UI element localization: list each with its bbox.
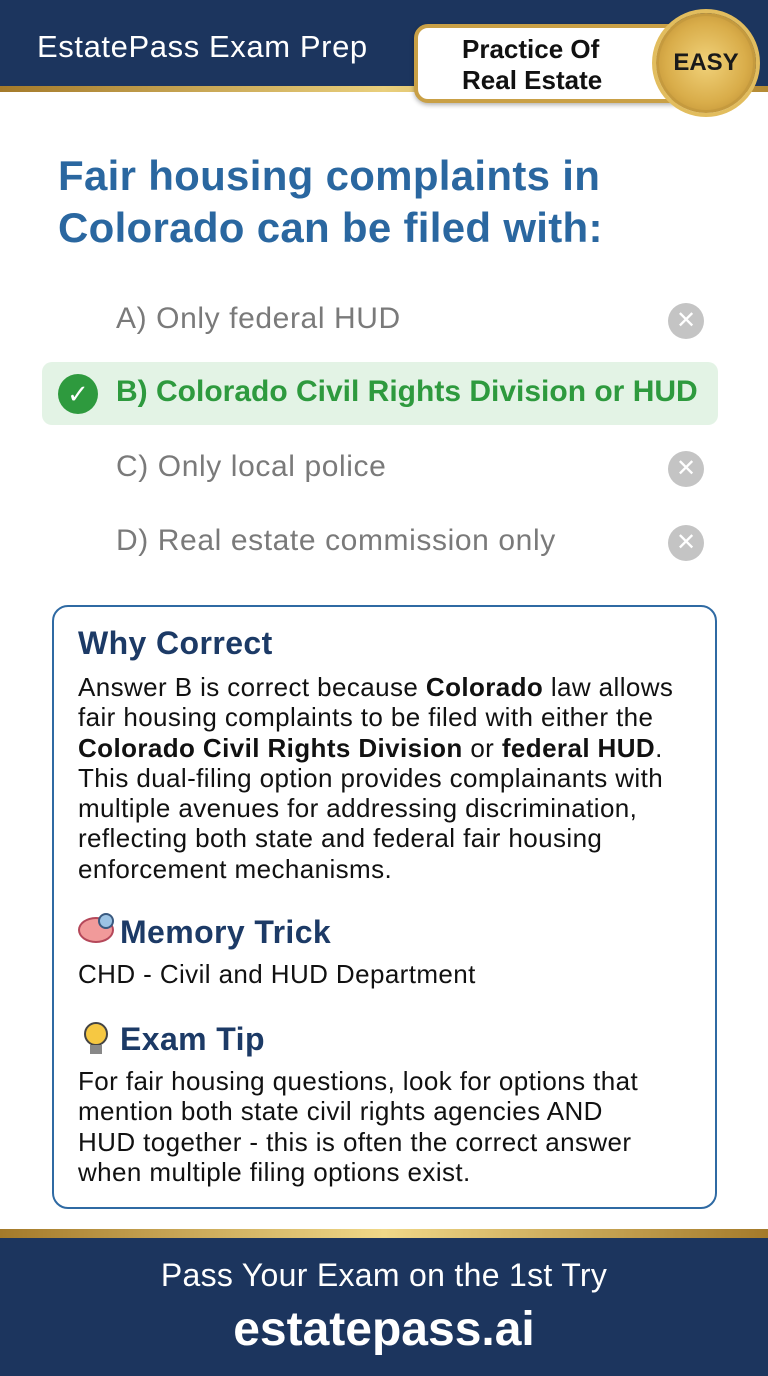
gold stripe top (0, 86, 768, 92)
option A: A) Only federal HUD (116, 302, 401, 335)
footer tagline: Pass Your Exam on the 1st Try (161, 1257, 607, 1293)
text: exam tip: HUD together - this is often the correct answer (78, 1127, 631, 1157)
seal: EASY: EASY (673, 49, 739, 76)
question heading: Colorado can be filed with: (58, 204, 603, 251)
option D (116, 524, 704, 561)
option C: C) Only local police (116, 450, 386, 483)
icon: x: ✕ (676, 307, 696, 334)
gold stripe bottom (0, 1229, 768, 1238)
text: exam tip: when multiple filing options exist. (78, 1157, 471, 1187)
text: explanation: Answer B is correct because Colorado law allows (78, 672, 673, 702)
badge: practice of real estate: Real Estate (462, 65, 602, 95)
text: exam tip (78, 1066, 638, 1187)
text: explanation: enforcement mechanisms. (78, 854, 392, 884)
icon: x (668, 303, 704, 339)
panel: explanation (52, 605, 717, 1209)
text: exam tip: For fair housing questions, look for options that (78, 1066, 638, 1096)
question heading: Fair housing complaints in (58, 152, 600, 199)
text: memory trick: CHD - Civil and HUD Department (78, 959, 476, 989)
text: explanation: Colorado Civil Rights Division or federal HUD. (78, 733, 663, 763)
option C (116, 450, 704, 487)
option B correct (42, 362, 718, 425)
heading: memory trick: Memory Trick (120, 914, 331, 950)
option A (116, 302, 704, 339)
text: exam tip: mention both state civil rights agencies AND (78, 1096, 603, 1126)
brand title: EstatePass Exam Prep (37, 29, 368, 64)
icon: brain (78, 913, 114, 943)
option B correct: B) Colorado Civil Rights Division or HUD (116, 375, 698, 408)
badge: practice of real estate (414, 24, 694, 103)
header bar (0, 0, 768, 88)
option D: D) Real estate commission only (116, 524, 556, 557)
heading: why correct: Why Correct (78, 625, 273, 661)
text: explanation: fair housing complaints to be filed with either the (78, 702, 653, 732)
icon: lightbulb (84, 1022, 108, 1054)
footer url: estatepass.ai (233, 1303, 535, 1356)
badge: practice of real estate: Practice Of (462, 34, 599, 64)
icon: x (668, 451, 704, 487)
heading: exam tip: Exam Tip (120, 1021, 265, 1057)
icon: x: ✕ (676, 529, 696, 556)
icon: x (668, 525, 704, 561)
icon: check (58, 374, 98, 414)
icon: check: ✓ (67, 379, 89, 409)
text: explanation: This dual-filing option provides complainants with (78, 763, 663, 793)
footer (0, 1238, 768, 1376)
icon: x: ✕ (676, 455, 696, 482)
text: explanation (78, 672, 673, 884)
text: explanation: reflecting both state and federal fair housing (78, 823, 602, 853)
text: explanation: multiple avenues for addressing discrimination, (78, 793, 637, 823)
seal: EASY (656, 13, 756, 113)
question heading (58, 152, 603, 251)
